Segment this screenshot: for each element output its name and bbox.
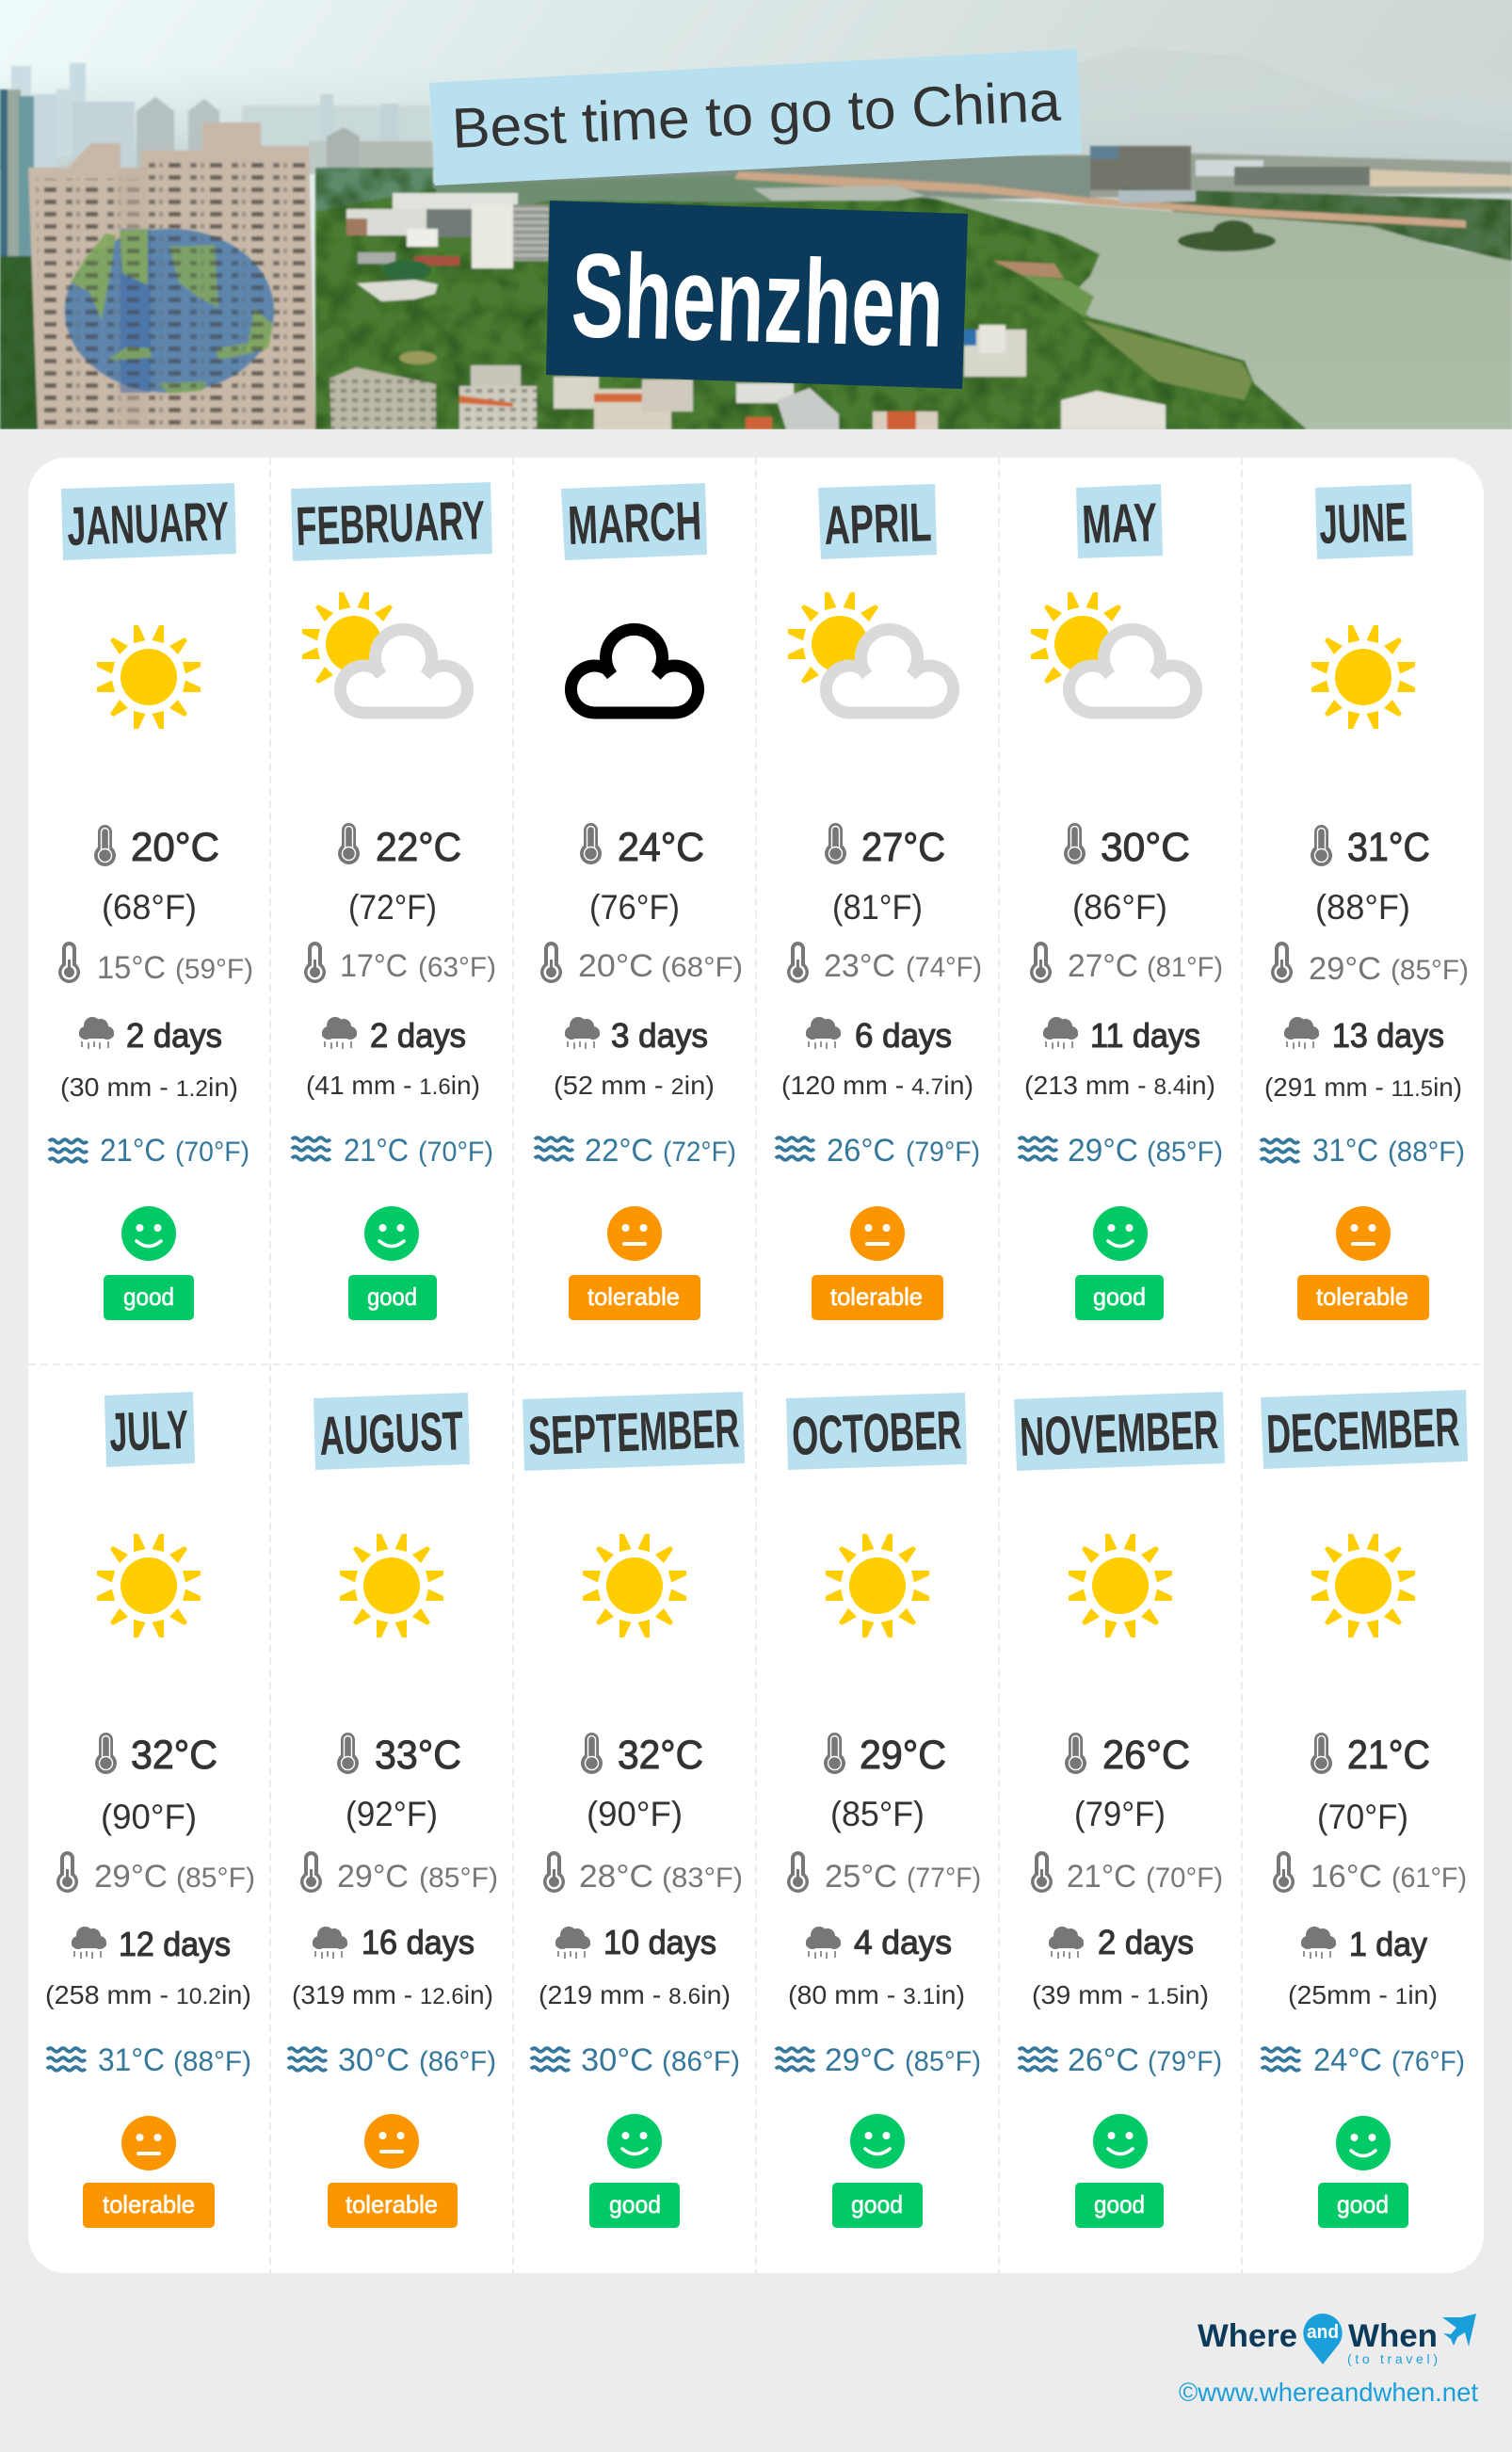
icon: black cloud (571, 629, 699, 713)
low temperature (540, 942, 743, 984)
sea temperature (1261, 1133, 1465, 1169)
rating: good (832, 2114, 923, 2228)
footer logo: Where and When: Where (1198, 2318, 1297, 2354)
high temperature (337, 1733, 461, 1778)
panel: November (1014, 1392, 1225, 2228)
icon: location pin: and (1307, 2322, 1339, 2343)
panel: May (1019, 484, 1223, 1320)
month label: October (786, 1393, 967, 1470)
icon: location pin (1303, 2314, 1343, 2364)
sea temperature: (85°F) (1147, 1137, 1223, 1168)
low temperature: 15°C (97, 950, 166, 986)
panel: September (523, 1392, 745, 2228)
high temperature: 30°C (1101, 825, 1190, 870)
rating: tolerable: tolerable (103, 2190, 195, 2218)
rainfall amount: (41 mm - 1.6in) (306, 1071, 480, 1100)
low temperature: 16°C (1311, 1859, 1382, 1895)
high temperature in Fahrenheit: (76°F) (589, 888, 680, 927)
low temperature (56, 1851, 255, 1895)
rainy days: 11 days (1090, 1016, 1200, 1055)
rainy days: 1 day (1349, 1925, 1427, 1963)
rainy days: 6 days (855, 1016, 952, 1055)
low temperature (787, 942, 982, 984)
icon: sun (1311, 1534, 1415, 1637)
low temperature: (70°F) (1146, 1863, 1223, 1894)
sea temperature (1262, 2042, 1465, 2078)
rainy days: 4 days (854, 1923, 952, 1961)
sea temperature (47, 2042, 251, 2078)
rating: good (1075, 1206, 1164, 1320)
month label: May: MAY (1081, 492, 1158, 556)
city title: Shenzhen (546, 201, 968, 389)
low temperature: (85°F) (419, 1863, 498, 1894)
rainfall amount: (39 mm - 1.5in) (1032, 1980, 1209, 2009)
low temperature: (63°F) (418, 952, 496, 983)
low temperature: 29°C (1309, 951, 1381, 987)
low temperature: 29°C (337, 1859, 409, 1895)
rainfall amount: (25mm - 1in) (1288, 1980, 1438, 2009)
sea temperature: 26°C (827, 1133, 895, 1169)
rating: tolerable: tolerable (830, 1282, 923, 1311)
low temperature (1030, 942, 1223, 984)
rainy days: 3 days (611, 1016, 708, 1055)
icon: sun (826, 1534, 929, 1637)
rating: good (589, 2114, 680, 2228)
month label: March: MARCH (567, 491, 702, 557)
sea temperature (776, 1133, 980, 1169)
sea temperature: 30°C (581, 2042, 653, 2078)
low temperature (58, 942, 253, 986)
sea temperature: 24°C (1313, 2042, 1382, 2078)
high temperature (338, 823, 461, 870)
low temperature: 25°C (825, 1859, 897, 1895)
low temperature: 20°C (578, 948, 653, 984)
rating: good: good (123, 1282, 174, 1311)
high temperature in Fahrenheit: (92°F) (346, 1795, 438, 1833)
low temperature: (85°F) (176, 1863, 255, 1894)
high temperature in Fahrenheit: (70°F) (1317, 1798, 1408, 1836)
high temperature in Fahrenheit: (79°F) (1074, 1795, 1166, 1833)
high temperature (825, 823, 945, 870)
month label: August: AUGUST (318, 1400, 464, 1467)
sea temperature (1019, 2042, 1222, 2078)
sea temperature: (70°F) (418, 1137, 493, 1168)
sea temperature: 31°C (98, 2042, 165, 2078)
city title: Shenzhen: Shenzhen (570, 228, 945, 372)
sea temperature: (85°F) (905, 2046, 981, 2077)
rating: good: good (1337, 2190, 1389, 2218)
rainy days (555, 1923, 716, 1961)
rainy days: 2 days (126, 1016, 222, 1055)
rainfall amount: (291 mm - 11.5in) (1264, 1073, 1462, 1102)
high temperature: 24°C (618, 825, 704, 870)
rainy days (79, 1016, 222, 1055)
month label: April: APRIL (823, 492, 932, 557)
rating: good: good (1093, 1282, 1146, 1311)
rating: good: good (609, 2190, 661, 2218)
rainfall amount: (120 mm - 4.7in) (781, 1071, 973, 1100)
sea temperature: (88°F) (1388, 1137, 1465, 1168)
sea temperature: (86°F) (662, 2046, 740, 2077)
high temperature: 21°C (1347, 1733, 1430, 1778)
month label: February (291, 482, 492, 561)
rating: tolerable: tolerable (346, 2190, 438, 2218)
sea temperature: (88°F) (173, 2046, 251, 2077)
month label: July (105, 1392, 195, 1467)
icon: sun (583, 1534, 686, 1637)
high temperature: 26°C (1102, 1733, 1190, 1778)
title banner: Best time to go to China: Best time to go to China (451, 70, 1063, 160)
low temperature: (61°F) (1391, 1863, 1467, 1894)
panel: August (288, 1393, 498, 2228)
sea temperature: 22°C (585, 1133, 653, 1169)
high temperature (824, 1733, 946, 1778)
sea temperature: 29°C (825, 2042, 895, 2078)
rainy days (806, 1923, 952, 1961)
icon: sun behind cloud (1031, 592, 1197, 713)
month label: October: OCTOBER (791, 1399, 962, 1467)
month label: April (818, 484, 937, 559)
month label: May (1076, 484, 1163, 558)
month label: September: SEPTEMBER (527, 1397, 740, 1467)
panel: December (1261, 1390, 1468, 2228)
rating: tolerable (812, 1206, 943, 1320)
high temperature: 22°C (376, 825, 461, 870)
rating: good (1075, 2114, 1164, 2228)
sea temperature: (79°F) (906, 1137, 980, 1168)
low temperature: 21°C (1067, 1859, 1136, 1895)
low temperature: (68°F) (661, 952, 743, 983)
title banner: Best time to go to China (429, 49, 1082, 186)
footer logo: Where and When: When (1348, 2318, 1438, 2354)
rainy days (322, 1016, 466, 1055)
panel: February (291, 482, 496, 1320)
high temperature (94, 825, 219, 870)
rainfall amount: (219 mm - 8.6in) (539, 1980, 731, 2009)
rainy days: 2 days (1098, 1923, 1194, 1961)
month label: August (314, 1393, 470, 1470)
low temperature (543, 1851, 743, 1895)
rainy days (1301, 1925, 1427, 1963)
high temperature: 29°C (860, 1733, 946, 1778)
panel: July (45, 1392, 255, 2228)
high temperature: 20°C (131, 825, 219, 870)
high temperature (1311, 1733, 1430, 1778)
rating: good: good (1094, 2190, 1145, 2218)
high temperature in Fahrenheit: (86°F) (1072, 888, 1167, 927)
low temperature (787, 1851, 981, 1895)
rainy days (72, 1925, 231, 1963)
panel: April (776, 484, 982, 1320)
rainfall amount: (319 mm - 12.6in) (292, 1980, 493, 2009)
rainy days: 12 days (119, 1925, 231, 1963)
low temperature: (77°F) (907, 1863, 981, 1894)
globe mural on tower (65, 229, 274, 394)
month label: March (561, 483, 707, 560)
sea temperature (776, 2042, 981, 2078)
sea temperature: (70°F) (175, 1137, 249, 1168)
icon: sun behind cloud (302, 592, 468, 713)
month label: June: JUNE (1318, 492, 1407, 556)
month label: November (1014, 1392, 1225, 1471)
rainy days: 13 days (1332, 1016, 1444, 1055)
rainy days (806, 1016, 952, 1055)
low temperature (304, 942, 496, 984)
low temperature: (85°F) (1391, 955, 1469, 986)
rainfall amount: (80 mm - 3.1in) (788, 1980, 965, 2009)
icon: sun (340, 1534, 443, 1637)
low temperature (1271, 942, 1469, 987)
footer logo: Where and When: (to travel) (1347, 2351, 1438, 2366)
low temperature: (74°F) (906, 952, 982, 983)
rainy days (1284, 1016, 1444, 1055)
sea temperature: 21°C (100, 1133, 166, 1169)
sea temperature (288, 2042, 496, 2078)
high temperature in Fahrenheit: (85°F) (830, 1795, 925, 1833)
sea temperature: (76°F) (1391, 2046, 1465, 2077)
low temperature: 17°C (340, 948, 408, 984)
sea temperature: 21°C (344, 1133, 409, 1169)
rating: good (1318, 2116, 1408, 2228)
weather card background (28, 458, 1484, 2273)
icon: sun (1069, 1534, 1172, 1637)
rating: tolerable: tolerable (587, 1282, 680, 1311)
sea temperature: (86°F) (419, 2046, 496, 2077)
rating: tolerable: tolerable (1316, 1282, 1408, 1311)
panel: June (1261, 484, 1469, 1320)
rainy days (1043, 1016, 1200, 1055)
rating: good: good (367, 1282, 417, 1311)
rainfall amount: (52 mm - 2in) (554, 1071, 715, 1100)
rainy days: 16 days (362, 1923, 475, 1961)
sea temperature: 31°C (1312, 1133, 1378, 1169)
month label: November: NOVEMBER (1019, 1399, 1219, 1468)
month label: January: JANUARY (66, 491, 230, 557)
icon: sun (1311, 625, 1415, 729)
high temperature (580, 823, 704, 870)
icon: airplane (1442, 2314, 1476, 2347)
low temperature: 28°C (579, 1859, 653, 1895)
month label: February: FEBRUARY (295, 490, 486, 557)
panel: October (776, 1393, 981, 2228)
rainfall amount: (258 mm - 10.2in) (45, 1980, 251, 2009)
month label: September (523, 1392, 745, 1471)
low temperature (1031, 1851, 1223, 1895)
rainy days: 2 days (370, 1016, 466, 1055)
high temperature in Fahrenheit: (88°F) (1315, 888, 1410, 927)
low temperature: (59°F) (175, 954, 253, 985)
low temperature (300, 1851, 498, 1895)
high temperature (95, 1733, 217, 1778)
rating: tolerable (569, 1206, 700, 1320)
rating: tolerable (328, 2114, 458, 2228)
high temperature (1065, 1733, 1190, 1778)
sea temperature (531, 2042, 740, 2078)
rainfall amount: (213 mm - 8.4in) (1024, 1071, 1215, 1100)
high temperature (581, 1733, 703, 1778)
high temperature in Fahrenheit: (90°F) (587, 1795, 683, 1833)
sea temperature (49, 1133, 249, 1169)
sea temperature (535, 1133, 736, 1169)
rainy days (313, 1923, 475, 1961)
month label: July: JULY (108, 1399, 189, 1463)
high temperature: 32°C (618, 1733, 703, 1778)
sea temperature: 30°C (338, 2042, 410, 2078)
rainfall amount: (30 mm - 1.2in) (60, 1073, 238, 1102)
high temperature in Fahrenheit: (72°F) (348, 888, 437, 927)
sea temperature (1019, 1133, 1223, 1169)
copyright URL: ©www.whereandwhen.net (1179, 2378, 1478, 2407)
icon: sun behind cloud (788, 592, 954, 713)
low temperature: 27°C (1068, 948, 1138, 984)
rating: tolerable (1297, 1206, 1429, 1320)
panel: January (49, 483, 253, 1320)
sea temperature: 26°C (1068, 2042, 1139, 2078)
sea temperature: 29°C (1068, 1133, 1138, 1169)
icon: sun (97, 625, 201, 729)
rating: good (104, 1206, 194, 1320)
month label: June (1315, 484, 1413, 559)
high temperature: 33°C (375, 1733, 461, 1778)
low temperature: (81°F) (1147, 952, 1223, 983)
footer logo: Where and When (1198, 2314, 1476, 2366)
low temperature (1273, 1851, 1467, 1895)
high temperature in Fahrenheit: (68°F) (102, 888, 197, 927)
hero photo: Shenzhen skyline and river (0, 0, 1512, 429)
sea temperature (292, 1133, 493, 1169)
rating: tolerable (83, 2116, 215, 2228)
rainy days (1049, 1923, 1194, 1961)
high temperature: 32°C (131, 1733, 217, 1778)
high temperature (1064, 823, 1190, 870)
low temperature: 29°C (94, 1859, 168, 1895)
low temperature: 23°C (824, 948, 895, 984)
high temperature: 31°C (1347, 825, 1430, 870)
rating: good (348, 1206, 437, 1320)
high temperature in Fahrenheit: (81°F) (832, 888, 923, 927)
high temperature: 27°C (861, 825, 945, 870)
rainy days (565, 1016, 708, 1055)
month label: January (61, 483, 236, 560)
low temperature: (83°F) (662, 1863, 743, 1894)
high temperature in Fahrenheit: (90°F) (101, 1798, 197, 1836)
sea temperature: (72°F) (663, 1137, 736, 1168)
rating: good: good (851, 2190, 903, 2218)
panel: March (535, 483, 743, 1320)
icon: sun (97, 1534, 201, 1637)
high temperature (1311, 825, 1430, 870)
rainy days: 10 days (603, 1923, 716, 1961)
sea temperature: (79°F) (1148, 2046, 1222, 2077)
